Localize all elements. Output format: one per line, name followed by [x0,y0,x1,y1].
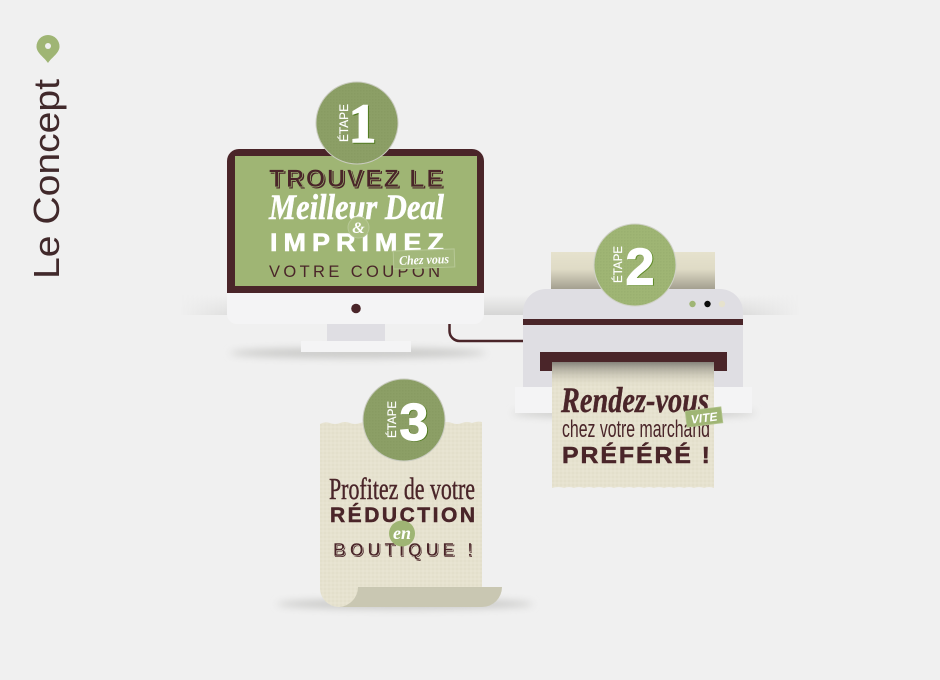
cable [450,324,523,341]
receipt sheet [320,422,482,607]
receipt shadow [277,599,533,609]
heading: Profitez de votre: Profitez de votre [329,471,475,506]
monitor stand [327,324,385,341]
badge: ampersand: & [352,220,365,237]
heading: BOUTIQUE !: BOUTIQUE ! [333,540,473,560]
step 2 badge [594,224,676,306]
horizon shadow [202,301,778,315]
heading: PRÉFÉRÉ !: PRÉFÉRÉ ! [562,442,710,469]
step 3 badge: ÉTAPE [386,401,399,438]
receipt curl [338,587,502,607]
heading: BOUTIQUE !: BOUTIQUE ! [334,541,474,561]
tag: VITE [685,407,723,427]
page title: Le Concept [26,35,67,279]
step 1 badge: 1 [349,93,376,154]
step 3 badge [363,379,445,461]
title text: Le Concept [26,79,67,279]
badge: en [389,520,415,546]
printer body [523,289,743,387]
printer shadow [512,408,756,418]
step 1 badge [316,82,398,164]
step 2 badge: ÉTAPE [612,246,625,283]
icon: location pin [36,35,60,63]
heading: TROUVEZ LE: TROUVEZ LE [269,165,443,193]
panel: step 1 monitor [227,82,486,358]
step 2 badge: 2 [627,239,655,297]
screen [235,156,477,286]
tag: Chez vous: Chez vous [399,251,449,268]
monitor base [301,341,411,352]
printer stripe [523,319,743,325]
heading: IMPRIMEZ: IMPRIMEZ [270,228,444,257]
panel: step 2 printer [512,224,756,488]
monitor frame [227,149,484,293]
printer slot [540,352,727,371]
badge: en: en [393,523,411,543]
printed coupon [552,362,714,488]
step 2 badge: 2 [626,238,654,296]
heading: Rendez-vous: Rendez-vous [560,380,709,420]
heading: Meilleur Deal: Meilleur Deal [268,187,444,227]
heading: RÉDUCTION: RÉDUCTION [330,504,475,527]
panel: step 3 receipt [277,379,533,609]
infographic canvas [34,35,778,612]
step 3 badge: 3 [401,394,429,452]
badge: ampersand [348,217,369,238]
heading: TROUVEZ LE: TROUVEZ LE [270,166,444,194]
status lights [689,301,725,307]
power dot [351,304,361,313]
tag: VITE: VITE [690,409,719,427]
monitor shadow [230,348,486,358]
monitor chin [227,293,484,324]
step 1 badge: ÉTAPE [338,104,351,142]
step 1 badge: 1 [350,94,377,155]
paper entering printer [551,252,715,290]
text: chez votre marchand: chez votre marchand [562,416,710,443]
step 3 badge: 3 [400,394,428,452]
text: VOTRE COUPON: VOTRE COUPON [269,263,440,281]
printer base [515,387,752,413]
